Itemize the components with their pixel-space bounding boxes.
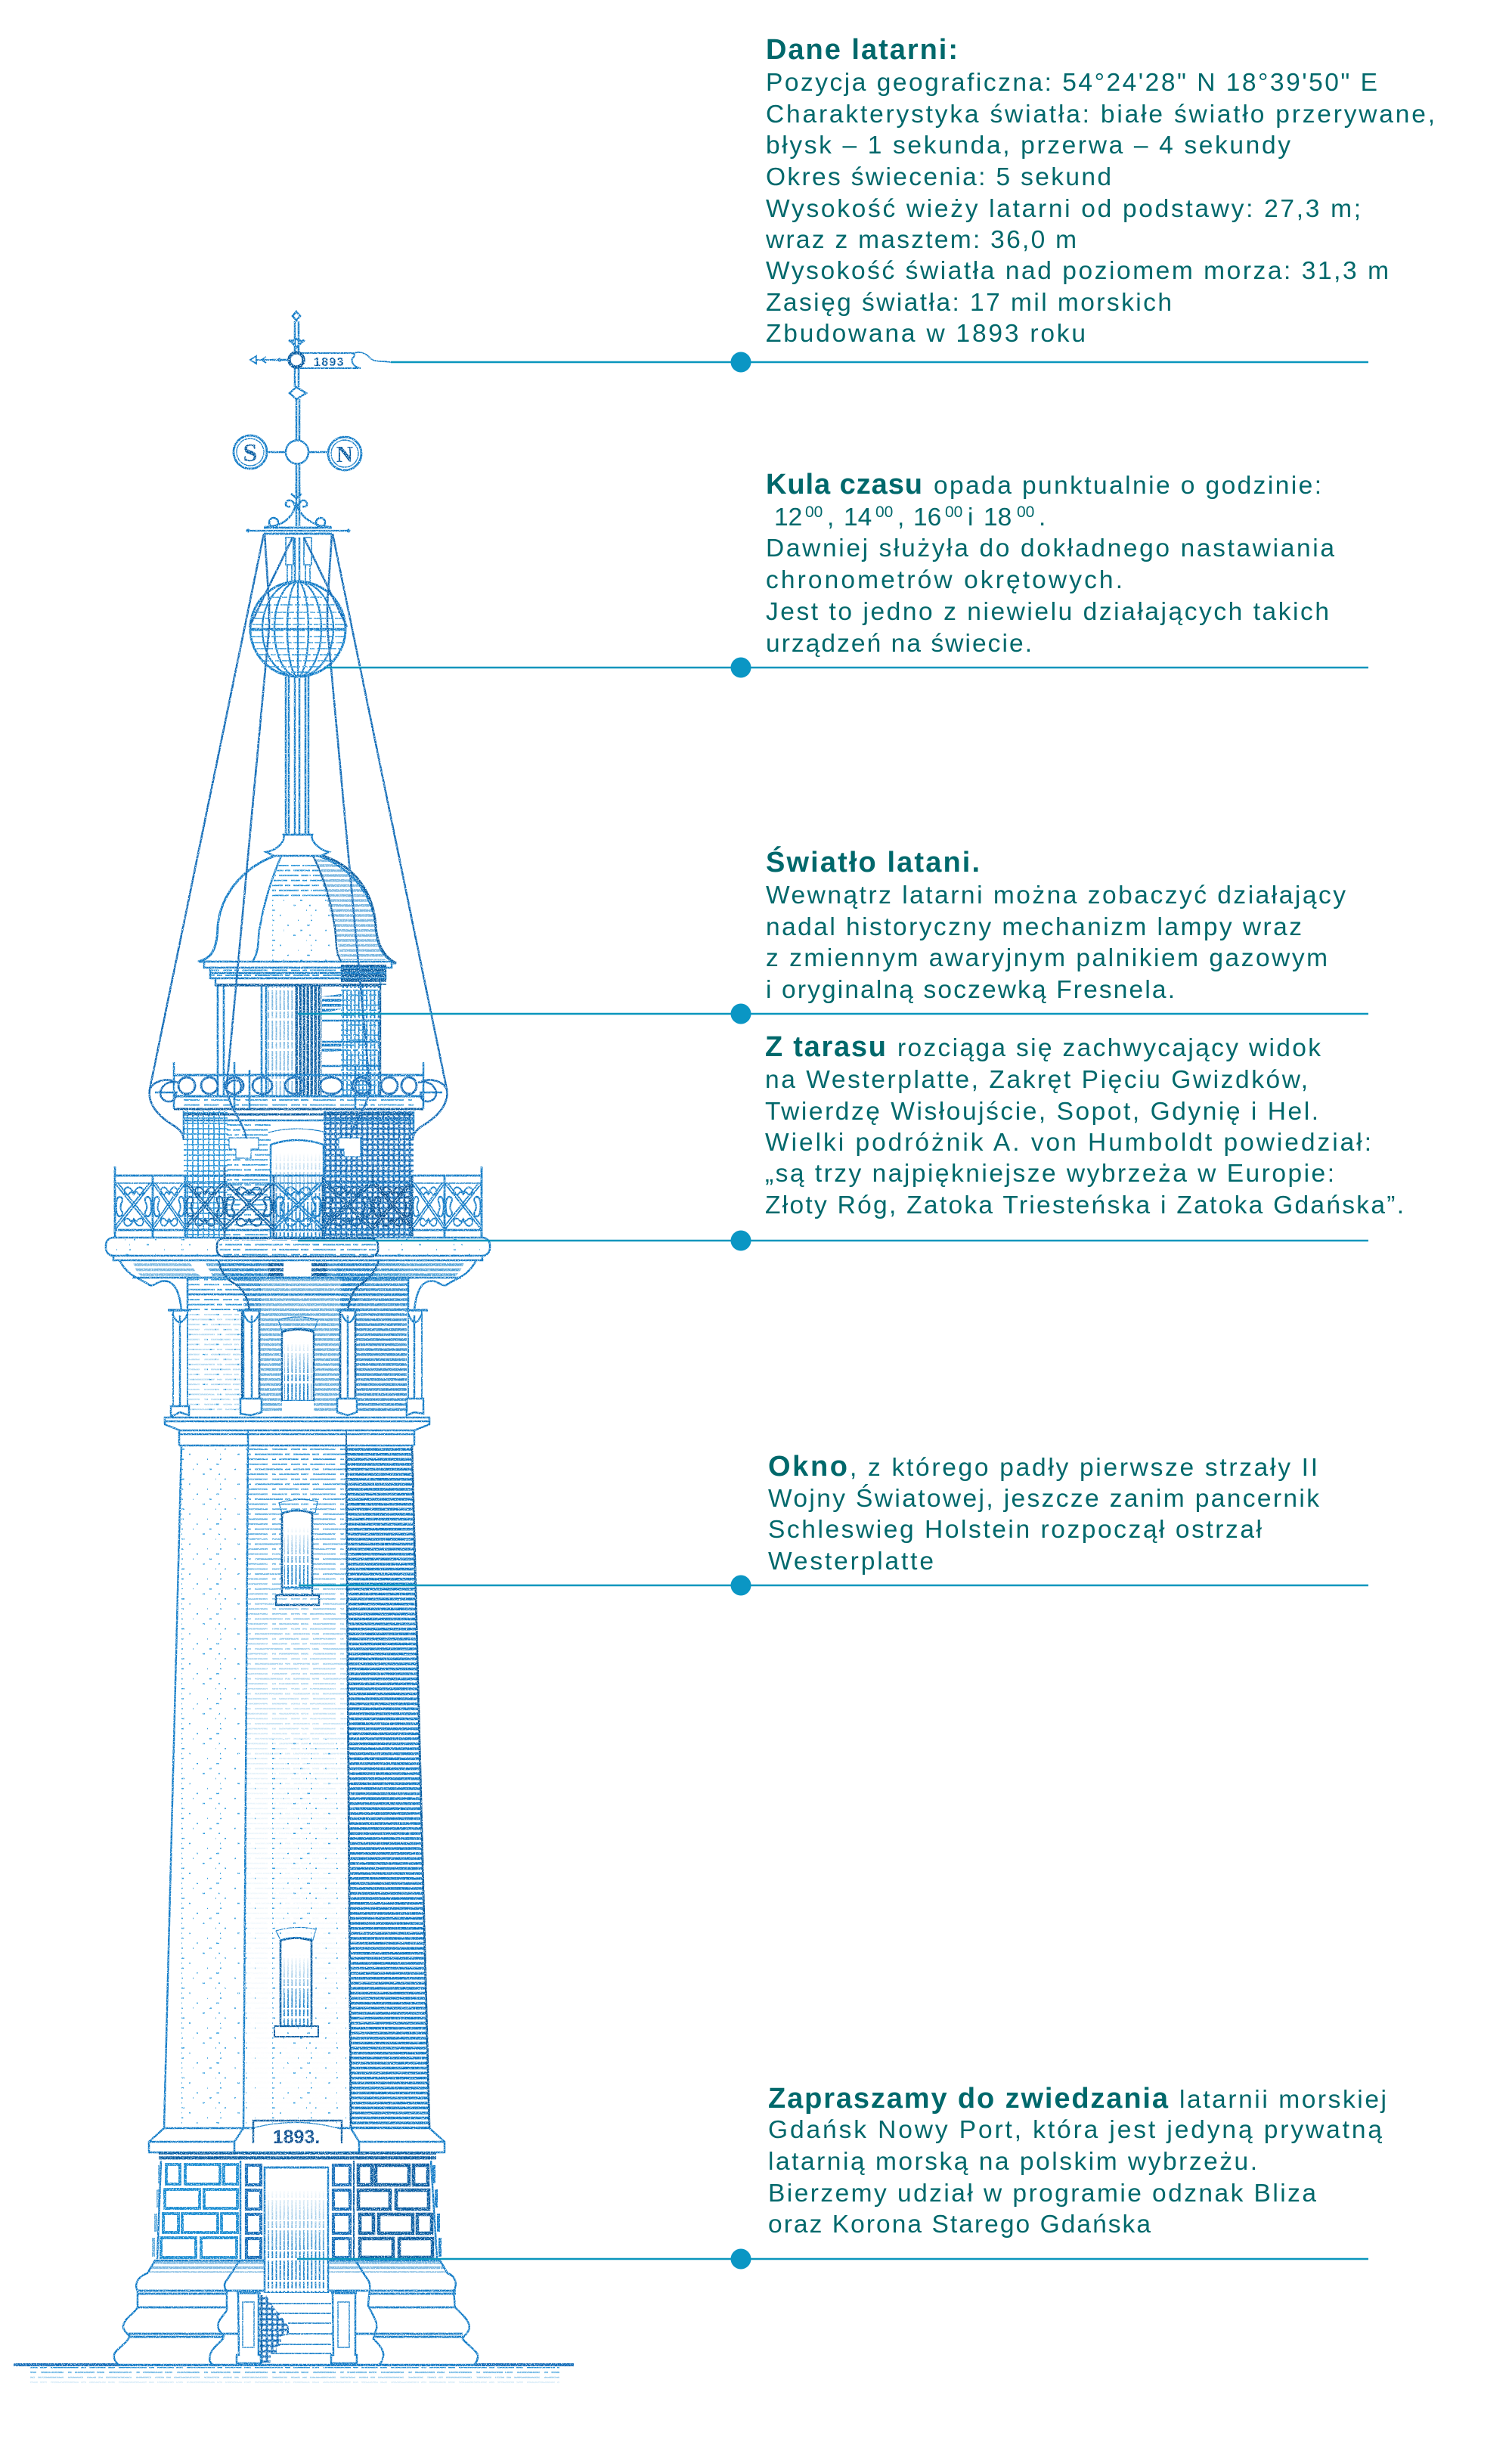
pilasters: [168, 1310, 428, 1417]
watch room door: [268, 1129, 327, 1238]
text block: time ball: ,: [827, 504, 834, 531]
entrance door: [265, 2167, 328, 2293]
text block: time ball: 14: [844, 504, 872, 531]
text block: terrace view: Wielki podróżnik A. von Humboldt powiedział:: [765, 1129, 1371, 1157]
text block: time ball: urządzeń na świecie.: [766, 630, 1032, 658]
text block: time ball: 16: [913, 504, 941, 531]
lantern dome: [198, 835, 396, 963]
text block: invitation: [768, 2083, 1387, 2239]
compass letter N: N: [336, 441, 353, 467]
finial scrolls: [269, 494, 325, 527]
lantern eaves: [204, 962, 392, 985]
text block: time ball: i: [968, 504, 973, 531]
gallery deck slab: [106, 1238, 490, 1260]
text block: lighthouse data: Zbudowana w 1893 roku: [766, 320, 1086, 348]
text block: lantern light: nadal historyczny mechanizm lampy wraz: [766, 913, 1302, 941]
text block: time ball: ,: [897, 504, 904, 531]
text block: time ball: Dawniej służyła do dokładnego nastawiania: [766, 534, 1334, 562]
tower upper tier with pilasters: [165, 1278, 429, 1445]
ground line: [14, 2365, 574, 2385]
tier faces: [181, 1278, 412, 1412]
text block: terrace view: Twierdzę Wisłoujście, Sopot, Gdynię i Hel.: [765, 1098, 1318, 1126]
text block: lighthouse data: wraz z masztem: 36,0 m: [765, 226, 1077, 254]
right stones: [358, 2165, 432, 2257]
text block: window: , z którego padły pierwsze strzały II: [850, 1454, 1318, 1482]
text block: terrace view: „są trzy najpiękniejsze wybrzeża w Europie:: [765, 1160, 1334, 1188]
vane banner: [300, 352, 391, 369]
text block: time ball: 18: [984, 504, 1012, 531]
gallery corbels and brackets: [119, 1256, 476, 1310]
text block: window: Okno: [768, 1451, 847, 1483]
vane banner: 1893: [314, 356, 345, 369]
text block: terrace view: Z tarasu: [765, 1031, 886, 1063]
weather vane: [250, 311, 391, 399]
plinth with date: [149, 2121, 445, 2161]
upper railing: [174, 1096, 423, 1114]
rusticated base wall: [153, 2161, 440, 2259]
compass letter N: [328, 437, 361, 470]
text block: terrace view: Złoty Róg, Zatoka Triesteńska i Zatoka Gdańska”.: [765, 1191, 1404, 1219]
stay cables: [150, 534, 447, 1140]
text block: lantern light: Wewnątrz latarni można zobaczyć działający: [766, 882, 1346, 909]
text block: terrace view: rozciąga się zachwycający widok: [897, 1034, 1321, 1062]
text block: lantern light: z zmiennym awaryjnym palnikiem gazowym: [766, 944, 1328, 972]
cornice above shaft: [165, 1418, 429, 1445]
text block: lantern light: i oryginalną soczewką Fresnela.: [766, 976, 1175, 1004]
text block: time ball: chronometrów okrętowych.: [766, 566, 1123, 594]
window upper: [276, 1499, 319, 1605]
text block: lighthouse data: Dane latarni:: [766, 34, 958, 66]
text block: time ball: 12: [774, 504, 802, 531]
stepped pedestal: [114, 2260, 478, 2365]
tier window: [278, 1317, 318, 1412]
leader: time ball: [325, 658, 1368, 677]
text block: terrace view: [765, 1031, 1404, 1219]
shaft right face: [346, 1445, 429, 2128]
text block: window: Westerplatte: [768, 1548, 934, 1576]
text block: invitation: latarnii morskiej: [1179, 2086, 1387, 2114]
text block: window: [768, 1451, 1319, 1576]
text block: terrace view: na Westerplatte, Zakręt Pięciu Gwizdków,: [765, 1066, 1308, 1094]
watch room below lantern: [184, 1111, 414, 1238]
lighthouse illustration: [14, 311, 574, 2385]
time ball: [250, 581, 345, 677]
text block: lighthouse data: Zasięg światła: 17 mil morskich: [766, 289, 1172, 317]
text block: lighthouse data: Pozycja geograficzna: 54°24'28" N 18°39'50" E: [766, 69, 1377, 97]
leader: terrace: [298, 1231, 1368, 1250]
text block: lighthouse data: [765, 34, 1435, 348]
entrance stairs: [237, 2293, 357, 2363]
text block: invitation: latarnią morską na polskim wybrzeżu.: [768, 2148, 1257, 2176]
lantern room: [218, 985, 380, 1096]
text block: invitation: Bierzemy udział w programie odznak Bliza: [768, 2180, 1316, 2208]
text block: invitation: oraz Korona Starego Gdańska: [768, 2211, 1151, 2239]
tower shaft: [164, 1445, 429, 2128]
text block: lighthouse data: Okres świecenia: 5 sekund: [766, 163, 1111, 191]
time ball mast: [284, 538, 312, 835]
text block: time ball: .: [1039, 504, 1046, 531]
text block: time ball: 00: [875, 504, 893, 521]
text block: time ball: Jest to jedno z niewielu działających takich: [766, 598, 1329, 626]
text block: lighthouse data: Charakterystyka światła: białe światło przerywane,: [766, 101, 1435, 129]
leader: entrance: [297, 2248, 1368, 2270]
stair pillars: [237, 2293, 261, 2363]
upper railing rings: [155, 1062, 442, 1109]
dome collar and finial base: [266, 835, 329, 856]
text block: time ball: [766, 469, 1334, 658]
ball guide frame: [246, 484, 351, 582]
text block: time ball: opada punktualnie o godzinie:: [934, 472, 1321, 500]
text block: lighthouse data: błysk – 1 sekunda, przerwa – 4 sekundy: [766, 132, 1290, 160]
text block: time ball: Kula czasu: [766, 469, 922, 500]
text block: window: Wojny Światowej, jeszcze zanim pancernik: [768, 1483, 1319, 1513]
leader: lantern: [298, 1004, 1368, 1024]
text block: lantern light: [766, 845, 1346, 1004]
text block: invitation: Zapraszamy do zwiedzania: [768, 2083, 1169, 2115]
text block: lighthouse data: Wysokość światła nad poziomem morza: 31,3 m: [766, 257, 1389, 285]
leader lines with dots: [297, 352, 1368, 2270]
central projection: [209, 2260, 383, 2365]
door-side stones: [246, 2165, 350, 2257]
plinth with date: 1893.: [273, 2127, 320, 2148]
compass letter S: [234, 435, 267, 469]
text block: lantern light: Światło latani.: [766, 845, 980, 878]
compass letter S: S: [243, 439, 257, 467]
text block: time ball: 00: [805, 504, 823, 521]
text block: window: Schleswieg Holstein rozpoczął ostrzał: [768, 1516, 1263, 1544]
leader: vane: [391, 352, 1368, 372]
text block: time ball: 00: [945, 504, 962, 521]
text block: invitation: Gdańsk Nowy Port, która jest jedyną prywatną: [768, 2116, 1382, 2144]
gallery railing: [115, 1167, 482, 1238]
compass wind indicator: [234, 399, 361, 495]
text block: time ball: 00: [1017, 504, 1034, 521]
leader: window: [299, 1576, 1368, 1595]
shaft middle face: [243, 1445, 351, 2128]
shaft left face: [164, 1445, 248, 2128]
text block: lighthouse data: Wysokość wieży latarni od podstawy: 27,3 m;: [766, 195, 1361, 223]
window lower: [274, 1927, 318, 2037]
left stones: [161, 2164, 237, 2257]
